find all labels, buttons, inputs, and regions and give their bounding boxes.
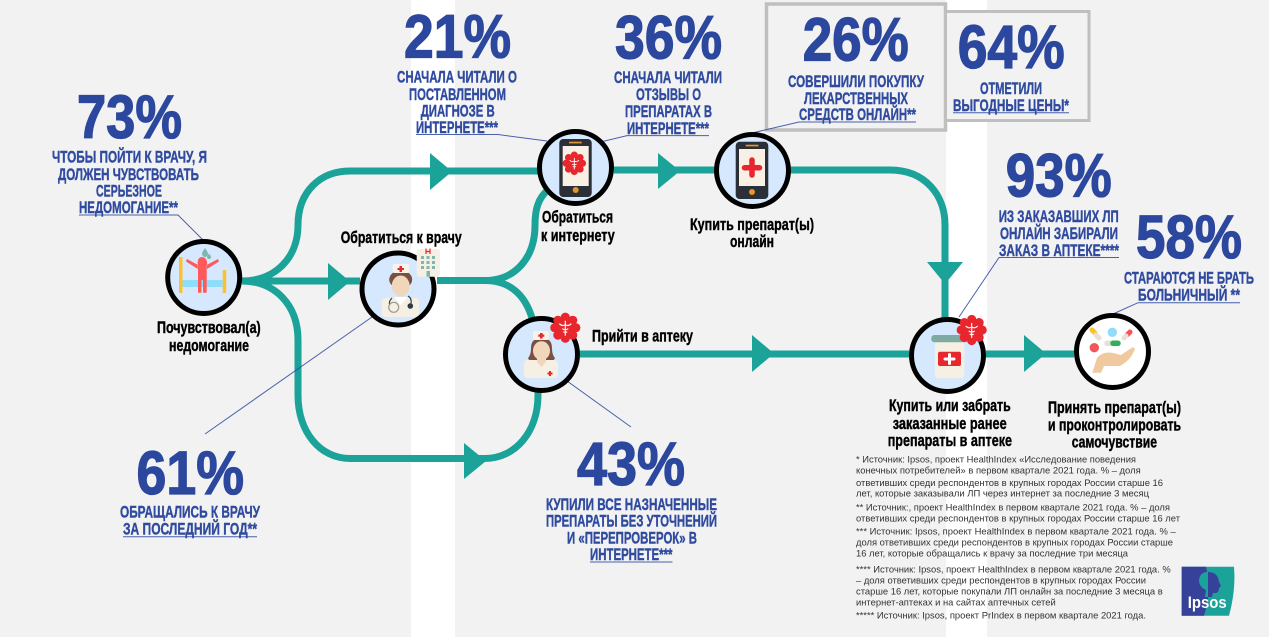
leader line <box>205 317 372 434</box>
number: 64% <box>958 13 1065 81</box>
description: ОНЛАЙН ЗАБИРАЛИ <box>1000 224 1118 243</box>
description <box>752 72 924 133</box>
panel: 64% box <box>947 12 1089 120</box>
step label: take medicine <box>1048 399 1181 452</box>
callout: 26% <box>752 6 924 133</box>
step label: feeling unwell <box>157 319 261 355</box>
number: 61% <box>136 439 244 507</box>
footnotes: старше 16 лет, которые покупали ЛП онлайн за последние 3 месяца в <box>856 586 1163 597</box>
description <box>120 503 260 539</box>
icon: pills in hand <box>1076 316 1148 388</box>
icon: phone with cross <box>716 134 788 206</box>
step label: see doctor: Обратиться к врачу <box>341 229 462 247</box>
step label: go to pharmacy: Прийти в аптеку <box>592 328 694 346</box>
description: СНАЧАЛА ЧИТАЛИ О <box>397 68 517 87</box>
description <box>397 68 547 141</box>
step label: buy in pharmacy: препараты в аптеке <box>888 432 1012 450</box>
footnotes: доля ответивших среди респондентов в крупных городах России старше <box>856 537 1173 548</box>
flow arrows <box>242 153 1074 479</box>
step label: take medicine: самочувствие <box>1072 434 1157 452</box>
callout: 21% <box>397 2 547 141</box>
footnotes: ***** Источник: Ipsos, проект PrIndex в первом квартале 2021 года. <box>856 610 1146 621</box>
step label: feeling unwell: Почувствовал(а) <box>157 319 261 337</box>
description: И «ПЕРЕПРОВЕРОК» В <box>567 529 697 548</box>
callout: 43% <box>546 381 717 564</box>
icon: feeling unwell <box>168 242 240 314</box>
step label: buy online: Купить препарат(ы) <box>690 216 814 234</box>
description: ЛЕКАРСТВЕННЫХ <box>804 89 908 108</box>
description <box>602 68 722 142</box>
icon: hospital <box>417 248 440 277</box>
footnotes: конечных потребителей» в первом квартале 2021 года. % – доля <box>856 465 1141 476</box>
description: ОТМЕТИЛИ <box>980 79 1042 98</box>
callout: 73% <box>52 83 207 240</box>
footnotes: * Источник: Ipsos, проект HealthIndex «Исследование поведения <box>856 454 1136 465</box>
description <box>1113 269 1254 314</box>
footnotes: 16 лет, которые обращались к врачу за последние три месяца <box>856 548 1129 559</box>
number: 58% <box>1136 203 1242 271</box>
number: 36% <box>615 4 722 72</box>
description: ОТЗЫВЫ О <box>636 85 701 104</box>
icon: doctor <box>362 253 434 325</box>
description: ЗА ПОСЛЕДНИЙ ГОД** <box>123 520 257 539</box>
footnotes: **** Источник: Ipsos, проект HealthIndex в первом квартале 2021 года. % <box>856 564 1171 575</box>
step label: internet: к интернету <box>541 227 615 245</box>
description <box>959 207 1119 317</box>
description: ОБРАЩАЛИСЬ К ВРАЧУ <box>120 503 260 522</box>
description: СЕРЬЕЗНОЕ <box>96 182 162 201</box>
description: СНАЧАЛА ЧИТАЛИ <box>614 68 722 87</box>
step label: internet <box>541 209 615 245</box>
step label: internet: Обратиться <box>542 209 613 227</box>
icon: pharmacist <box>506 318 578 390</box>
footnotes: ответивших среди респондентов в крупных городах России старше 16 <box>856 477 1163 488</box>
footnotes: ответивших среди респондентов в крупных городах России старше 16 лет <box>856 513 1181 524</box>
description: ПРЕПАРАТАХ В <box>625 102 712 121</box>
panel: 26% box <box>766 4 946 130</box>
white band right <box>946 0 987 637</box>
description: ЗАКАЗ В АПТЕКЕ**** <box>999 241 1119 260</box>
callout: 64% <box>953 13 1069 115</box>
description: НЕДОМОГАНИЕ** <box>79 198 178 217</box>
step label: take medicine: Принять препарат(ы) <box>1048 399 1181 417</box>
number: 21% <box>404 2 511 70</box>
step label: buy in pharmacy: заказанные ранее <box>893 415 1007 433</box>
description <box>953 79 1069 115</box>
step label: buy in pharmacy <box>888 397 1012 450</box>
description: ДОЛЖЕН ЧУВСТВОВАТЬ <box>58 165 199 184</box>
step label: buy online: онлайн <box>730 233 774 251</box>
footnotes: лет, которые заказывали ЛП через интернет за последние 3 месяц <box>856 488 1150 499</box>
step label: take medicine: и проконтролировать <box>1048 417 1181 435</box>
icon: phone with pharmacy badge <box>540 132 612 204</box>
description: ДИАГНОЗЕ В <box>421 102 495 121</box>
leader line <box>567 381 631 427</box>
icon: pharmacy badge <box>550 313 580 343</box>
footnotes: интернет-аптеках и на сайтах аптечных сетей <box>856 597 1056 608</box>
description <box>546 495 717 564</box>
description: ВЫГОДНЫЕ ЦЕНЫ* <box>953 96 1069 115</box>
white band left <box>411 0 455 637</box>
footnotes <box>856 454 1181 621</box>
callout: 58% <box>1113 203 1254 314</box>
icon: medicine jar <box>912 320 984 392</box>
callout: 93% <box>959 142 1119 317</box>
footnotes: *** Источник: Ipsos, проект HealthIndex в первом квартале 2021 года. % – <box>856 526 1176 537</box>
description: ПРЕПАРАТЫ БЕЗ УТОЧНЕНИЙ <box>546 512 717 531</box>
number: 26% <box>803 6 909 74</box>
description: ПОСТАВЛЕННОМ <box>409 85 506 104</box>
callout: 61% <box>120 317 372 539</box>
description: ИЗ ЗАКАЗАВШИХ ЛП <box>999 207 1119 226</box>
step label: feeling unwell: недомогание <box>169 337 249 355</box>
footnotes: ** Источник:, проект HealthIndex в первом квартале 2021 года. % – доля <box>856 502 1170 513</box>
description: ИНТЕРНЕТЕ*** <box>590 545 673 564</box>
icon: pharmacy badge <box>957 315 987 345</box>
logo: Ipsos: Ipsos <box>1188 593 1227 612</box>
description: КУПИЛИ ВСЕ НАЗНАЧЕННЫЕ <box>546 495 717 514</box>
footnotes: – доля ответивших среди респондентов в крупных городах России <box>856 575 1146 586</box>
step label: buy online <box>690 216 814 251</box>
description <box>52 148 207 240</box>
description: СОВЕРШИЛИ ПОКУПКУ <box>788 72 924 91</box>
description: ЧТОБЫ ПОЙТИ К ВРАЧУ, Я <box>52 148 207 167</box>
step label: buy in pharmacy: Купить или забрать <box>889 397 1011 415</box>
logo: Ipsos <box>1182 567 1234 616</box>
number: 73% <box>77 83 182 151</box>
number: 43% <box>577 430 685 498</box>
description: ИНТЕРНЕТЕ*** <box>416 118 498 137</box>
description: ИНТЕРНЕТЕ*** <box>627 119 709 138</box>
description: СРЕДСТВ ОНЛАЙН** <box>799 105 916 124</box>
callout: 36% <box>602 4 722 142</box>
number: 93% <box>1006 142 1112 210</box>
